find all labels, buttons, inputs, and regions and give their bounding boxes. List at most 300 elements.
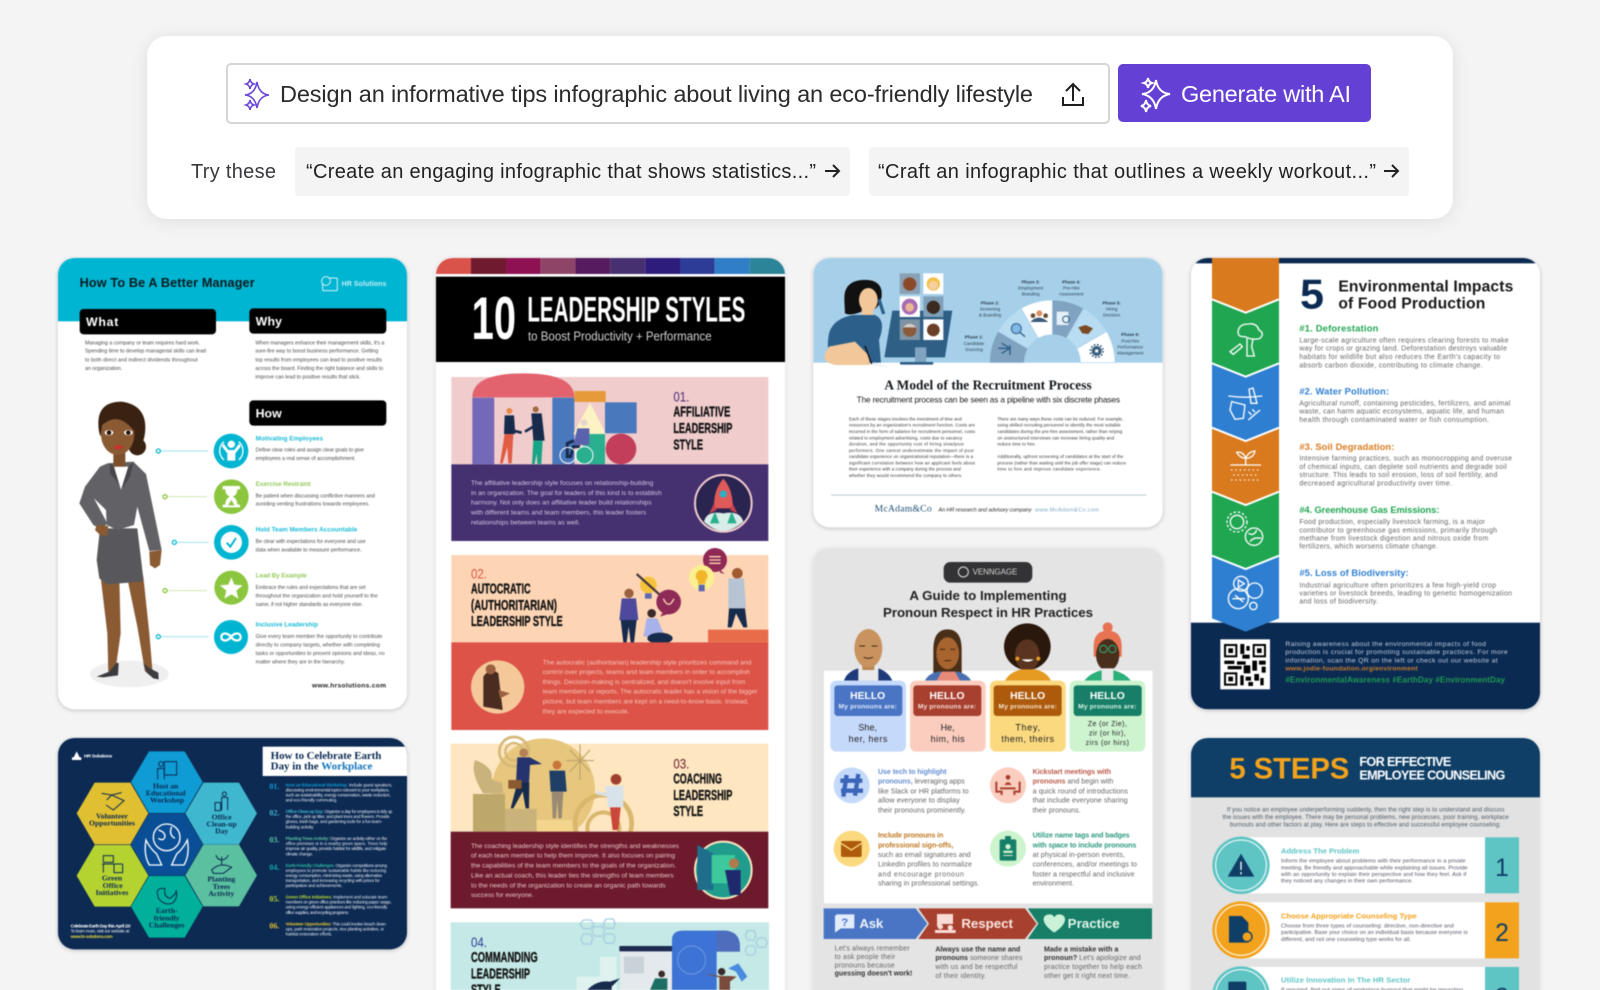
suggestion chip 1 bbox=[295, 147, 850, 196]
left column text: resources by an organization's recruitment function. Costs are bbox=[849, 423, 976, 428]
generate button bbox=[1118, 64, 1371, 122]
name tag: he: He, bbox=[941, 722, 955, 732]
respect text bbox=[934, 946, 1023, 980]
section 02 autocratic bbox=[451, 548, 768, 730]
step 2: participative. Base your choice on an individual basis because everyone is bbox=[1281, 930, 1468, 936]
right column text: using skilled recruiting personnel to identify the most suitable bbox=[997, 423, 1121, 428]
list item 01: such as sustainability, energy conservation, waste reduction, bbox=[286, 792, 391, 797]
body text 02: The autocratic (authoritarian) leadership style prioritizes command and bbox=[543, 659, 752, 666]
practice text: pronoun? Let's apologize and bbox=[1044, 955, 1141, 962]
intro text: burnouts and other factors at play. Here are steps to effective and successful employee counseling: bbox=[1230, 823, 1501, 829]
how item 4 text: throughout the organization and hold yourself to the bbox=[256, 593, 378, 599]
name tag: they: They, bbox=[1015, 722, 1040, 732]
impact 5: #5. Loss of Biodiversity: bbox=[1299, 568, 1409, 578]
why text: across the board. Finding the right balance and skills to bbox=[255, 366, 383, 372]
list item 04 bbox=[269, 863, 388, 888]
section 04 commanding bbox=[451, 919, 769, 990]
impact 4 bbox=[1299, 505, 1497, 550]
tip: kickstart meetings: a quick round of introductions bbox=[1033, 787, 1128, 795]
intro text: If you notice an employee underperforming suddenly, then the right step is to understand and discuss bbox=[1227, 807, 1504, 813]
title: 10: 10 bbox=[472, 284, 516, 352]
illustration: woman on a video call bbox=[824, 273, 952, 368]
list item 05 bbox=[269, 895, 392, 915]
body text 02: they are expected to execute. bbox=[543, 708, 629, 715]
name tag: ze: HELLO bbox=[1090, 691, 1125, 702]
body text 02: team members or reports. The autocratic leader has a vision of the bigger bbox=[543, 689, 758, 696]
step 2: different, and not one counseling type works for all. bbox=[1281, 937, 1411, 943]
hex: office clean-up: Office bbox=[212, 812, 232, 821]
hex: earth-friendly challenges: Earth- bbox=[156, 906, 178, 915]
illustration: businesswoman bbox=[79, 402, 169, 687]
phase labels: Phase 6: bbox=[1121, 332, 1140, 337]
body text 03: to the needs of the organization to create an organic path towards bbox=[471, 882, 666, 889]
illustration: bald person bbox=[844, 629, 892, 681]
Venngage badge bbox=[944, 562, 1032, 583]
heading 02: LEADERSHIP STYLE bbox=[471, 614, 563, 630]
impact 1: #1. Deforestation bbox=[1299, 324, 1379, 334]
title: subtitle bbox=[1359, 755, 1505, 783]
connector lines bbox=[161, 451, 209, 637]
icon: soil plant bbox=[1230, 451, 1261, 480]
right column text: process (rather than waiting until the job offer stage) can reduce bbox=[997, 460, 1127, 465]
title: Environmental Impacts bbox=[1338, 278, 1514, 295]
title: A Model of the Recruitment Process bbox=[884, 377, 1092, 392]
list item 04: Earth-Friendly Challenges: Organize competitions among bbox=[286, 863, 388, 868]
icon: infinity bbox=[214, 620, 248, 654]
label: practice: Practice bbox=[1068, 916, 1120, 931]
icon: purple sparkle bbox=[245, 79, 269, 110]
gallery of infographic cards bbox=[58, 258, 1540, 990]
ask text bbox=[835, 946, 912, 978]
phase labels: Candidate bbox=[964, 341, 985, 346]
ask respect practice banner bbox=[824, 908, 1152, 939]
list item 03 bbox=[269, 836, 388, 856]
name tag: ze: My pronouns are: bbox=[1078, 703, 1136, 710]
tip: name tags: with space to include pronouns bbox=[1032, 841, 1136, 849]
chart: phase wheel bbox=[990, 300, 1115, 363]
tip: sign-offs: professional sign-offs, bbox=[878, 841, 953, 849]
impact 2: #2. Water Pollution: bbox=[1299, 387, 1389, 397]
phase labels: Phase 4: bbox=[1062, 280, 1081, 285]
icon: coach at whiteboard bbox=[695, 842, 752, 898]
right column text: time to hire and improve candidate experience. bbox=[997, 467, 1101, 472]
name tag: she bbox=[830, 681, 906, 752]
tip: sign-offs: sharing in professional settings. bbox=[878, 880, 979, 888]
list item 01 bbox=[269, 782, 392, 803]
footer text: Raising awareness about the environmental impacts of food bbox=[1285, 641, 1486, 648]
how box bbox=[249, 400, 386, 426]
logo: HR Solutions: HR Solutions bbox=[342, 281, 386, 288]
phase labels: Decision bbox=[1103, 312, 1121, 317]
body text 02: control over projects, teams and team members in order to accomplish bbox=[543, 669, 750, 676]
card: Pronoun Respect guide bbox=[812, 548, 1163, 990]
why text: sure-fire way to boost business performance. Getting bbox=[255, 349, 378, 355]
how box: How bbox=[256, 406, 282, 420]
prompt text: Design an informative tips infographic about living an eco-friendly lifestyle bbox=[280, 81, 1033, 107]
title: 5 steps: 5 STEPS bbox=[1229, 753, 1349, 786]
heading 03: STYLE bbox=[673, 804, 703, 820]
tip: sign-offs: such as email signatures and bbox=[878, 851, 971, 859]
icon: leader portrait bbox=[471, 660, 524, 714]
right column text bbox=[997, 416, 1127, 472]
body text 01: relationships between teams as well. bbox=[471, 519, 580, 526]
impact 3 bbox=[1299, 442, 1512, 487]
how item 4 text: Embrace the rules and expectations that are set bbox=[256, 585, 366, 591]
illustration: hexagon pattern and blueprint bbox=[577, 919, 767, 990]
phase labels bbox=[964, 280, 1144, 355]
tip: name tags: environment. bbox=[1033, 880, 1074, 888]
how item 2 text: avoiding venting frustrations towards employees. bbox=[256, 502, 370, 508]
name tag: he: him, his bbox=[931, 734, 965, 744]
how item 5 text: directly to company targets, whether with completing bbox=[256, 643, 380, 649]
list item 05: members on green office practices like reducing paper usage, bbox=[286, 900, 392, 905]
illustration: long-haired person bbox=[925, 629, 971, 681]
tip: sign-offs: Include pronouns in bbox=[878, 832, 943, 840]
impact 2: waste, can harm aquatic ecosystems, aquatic life, and human bbox=[1298, 409, 1504, 416]
celebrate note: Celebrate Earth Day this April 22! bbox=[71, 923, 131, 928]
name tag: ze: zirs (or hirs) bbox=[1086, 740, 1129, 747]
list item 04: 04. bbox=[269, 863, 279, 872]
impact 1 bbox=[1298, 324, 1509, 369]
subtitle: to Boost Productivity + Performance bbox=[528, 330, 712, 344]
list item 02: gloves, trash bags, and gardening tools for a fun team- bbox=[286, 819, 383, 824]
tip: sign-offs bbox=[834, 831, 979, 888]
list item 05: Green Office Initiatives: Implement and educate team bbox=[286, 895, 388, 900]
what text bbox=[85, 340, 206, 372]
right column text: There are many ways these costs can be reduced. For example, bbox=[997, 416, 1123, 421]
step 3: Utilize Innovation In The HR Sector bbox=[1281, 976, 1410, 985]
title box: How to Celebrate Earth bbox=[271, 750, 381, 762]
left column text: significant correlation between how an applicant feels about bbox=[849, 460, 976, 465]
tip: name tags: Utilize name tags and badges bbox=[1033, 832, 1130, 840]
left column text: duration, and the opportunity cost of hiring slow/poor bbox=[849, 442, 965, 447]
list item 02 bbox=[269, 809, 393, 829]
respect text: with us and be respectful bbox=[934, 964, 1018, 971]
tip: use tech: allow everyone to display bbox=[878, 797, 960, 805]
phase labels: Performance bbox=[1117, 344, 1144, 349]
how item 2 text bbox=[256, 481, 375, 508]
phase labels: Phase 5: bbox=[1102, 300, 1121, 305]
suggestion chip 2 bbox=[869, 147, 1409, 196]
illustration: team with lightbulbs bbox=[619, 548, 768, 644]
left column text: related to employment advertising, costs due to vacancy bbox=[849, 435, 963, 440]
ribbon of colored chevrons bbox=[1212, 258, 1279, 632]
step 1: with an opportunity to explain their perspective and how they feel. Ask if bbox=[1280, 872, 1467, 878]
illustration: person with head wrap bbox=[1084, 622, 1131, 681]
title: How To Be A Better Manager bbox=[80, 276, 255, 290]
heading 04 bbox=[471, 934, 538, 990]
phase labels: Assessment bbox=[1059, 292, 1084, 297]
why text: top results from employees can lead to positive results bbox=[255, 357, 382, 363]
impact 1: habitats for wildlife but also reduces the Earth's capacity to bbox=[1299, 354, 1500, 361]
list item 05: using energy-efficient appliances and lighting, eco-friendly bbox=[286, 905, 388, 910]
tip: kickstart meetings: their pronouns. bbox=[1033, 807, 1081, 815]
right column text: Additionally, upfront screening of candidates at the start of the bbox=[997, 454, 1124, 459]
card: A Model of the Recruitment Process bbox=[813, 258, 1163, 527]
icon: question bubble: ? bbox=[841, 917, 848, 929]
phase labels: & Boarding bbox=[979, 312, 1002, 317]
tip: use tech: like Slack or HR platforms to bbox=[878, 787, 969, 795]
phase labels: Hiring bbox=[1106, 306, 1118, 311]
list item 06: ups, park restoration projects, tree planting activities, or bbox=[286, 927, 385, 932]
tip: kickstart meetings bbox=[990, 767, 1128, 815]
how item 5 text: matter where they are in the hierarchy. bbox=[256, 660, 345, 666]
impact 3: of chemical inputs, can deplete soil nutrients and degrade soil bbox=[1299, 464, 1507, 471]
list item 02: the office, pick up litter, and plant trees and flowers. Provide bbox=[286, 814, 390, 819]
celebrate note bbox=[70, 923, 131, 939]
phase labels: Phase 1: bbox=[965, 334, 984, 339]
list item 01: and eco-friendly commuting. bbox=[286, 798, 337, 803]
how item 5 text: Give every team member the opportunity to contribute bbox=[256, 634, 382, 640]
name tag: ze: zir (or hir), bbox=[1089, 730, 1126, 737]
hex: host workshop bbox=[131, 751, 203, 813]
wheel icons bbox=[998, 310, 1103, 357]
title: A Guide to Implementing bbox=[909, 588, 1067, 603]
footer text: production is crucial for promoting sustainable practices. For more bbox=[1285, 649, 1508, 656]
what box: What bbox=[86, 315, 118, 329]
body text 03: The coaching leadership style identifies the strengths and weaknesses bbox=[471, 843, 680, 850]
icon: people with speech bubble bbox=[935, 914, 956, 933]
heading 01: LEADERSHIP bbox=[673, 421, 732, 437]
logo: HR Solutions bbox=[322, 277, 386, 291]
icon: warning triangle bbox=[1228, 854, 1254, 877]
step 2: Choose from three types of counseling: directive, non-directive and bbox=[1281, 923, 1454, 929]
logo: HR Solutions: HR Solutions bbox=[84, 753, 113, 759]
impact 2: health through contaminated water or fish consumption. bbox=[1299, 417, 1489, 424]
list item 01: Host an Educational Workshop: Include guest speakers, bbox=[286, 782, 392, 787]
illustration: curly-haired person bbox=[1004, 623, 1051, 681]
name tag: they: them, theirs bbox=[1001, 734, 1054, 744]
hex: volunteer opportunities bbox=[77, 783, 148, 844]
respect text: Always use the name and bbox=[935, 946, 1020, 953]
impact 1: Large-scale agriculture often requires clearing forests to make bbox=[1299, 337, 1509, 344]
why text bbox=[255, 340, 384, 380]
ask text: pronouns because bbox=[835, 962, 895, 969]
phase labels: Branding bbox=[1022, 292, 1040, 297]
hex: office clean-up: Day bbox=[215, 827, 228, 836]
what box bbox=[80, 309, 216, 334]
card: How to Celebrate Earth Day bbox=[58, 738, 407, 949]
list item 05: office supplies, and recycling programs. bbox=[286, 910, 349, 915]
left column text: performers. One cannot underestimate the impact of poor bbox=[849, 448, 975, 453]
phase labels: Phase 3: bbox=[1021, 280, 1040, 285]
impact 4: #4. Greenhouse Gas Emissions: bbox=[1299, 505, 1439, 515]
card: 5 Environmental Impacts bbox=[1191, 258, 1540, 709]
impact 2: Agricultural runoff, containing pesticides, fertilizers, and animal bbox=[1299, 401, 1511, 408]
footer logo and tagline: An HR research and advisory company bbox=[937, 507, 1033, 513]
how item 2 text: Be patient when discussing conflictive manners and bbox=[256, 493, 375, 499]
left column text bbox=[849, 416, 976, 478]
impact 3: #3. Soil Degradation: bbox=[1299, 442, 1394, 452]
impact 1: way for crops or grazing land. Deforestation destroys valuable bbox=[1298, 346, 1507, 353]
ask text: Let's always remember bbox=[835, 946, 910, 953]
icon: question bubble bbox=[835, 914, 854, 933]
hex: host workshop: Workshop bbox=[150, 796, 184, 805]
tip: sign-offs: LinkedIn profiles to normalize bbox=[878, 860, 972, 868]
name tag: she: My pronouns are: bbox=[838, 703, 897, 710]
impact 4: Food production, especially livestock farming, is a major bbox=[1299, 519, 1486, 526]
phase labels: Screening bbox=[980, 306, 1001, 311]
phase labels: Management bbox=[1117, 350, 1144, 355]
left column text: their experience with a company during the process and bbox=[849, 467, 961, 472]
how item 1 text: Motivating Employees bbox=[256, 435, 323, 442]
body text 01 bbox=[470, 480, 662, 526]
hex: green office: Green bbox=[102, 874, 123, 883]
hex: planting trees: Planting bbox=[208, 875, 235, 884]
impact 5: Industrial agriculture often prioritizes a few high-yield crop bbox=[1299, 582, 1496, 589]
ask text: to ask people their bbox=[835, 954, 896, 961]
step 1: they noticed any changes in their own performance. bbox=[1281, 879, 1413, 885]
section 03 coaching bbox=[451, 737, 768, 908]
list item 04: energy consumption, minimizing waste, using alternative bbox=[286, 873, 383, 878]
how item 5 text bbox=[256, 622, 385, 666]
QR code bbox=[1220, 639, 1270, 689]
body text 03: Like an actual coach, this leader ties the strengths of team members bbox=[471, 872, 674, 879]
icon: exercise restraint bbox=[214, 479, 249, 514]
phase labels: Phase 2: bbox=[981, 300, 1000, 305]
how item 1 text: employees a real sense of accomplishment. bbox=[256, 456, 356, 462]
hex: planting trees: Trees bbox=[213, 882, 230, 891]
step 3 bbox=[1212, 966, 1519, 990]
illustration: building blocks and people bbox=[472, 373, 637, 464]
list item 04: participation and achievements. bbox=[286, 883, 342, 888]
icon: star bbox=[214, 571, 248, 605]
left column text: candidate experience on organizational reputation—there is a bbox=[849, 454, 974, 459]
heading 04: 04. bbox=[471, 934, 487, 950]
list item 05: 05. bbox=[269, 895, 279, 904]
list item 04: employees to promote sustainable habits like reducing bbox=[286, 868, 387, 873]
tip: name tags: at physical in-person events, bbox=[1033, 851, 1125, 859]
phase labels: Employment bbox=[1018, 286, 1044, 291]
celebrate note: To learn more, visit our website at: bbox=[71, 929, 130, 934]
what text: an organization. bbox=[85, 366, 122, 372]
practice text bbox=[1044, 946, 1142, 980]
how item 5 text: tasks or opportunities to present opinions and ideas, no bbox=[256, 651, 385, 657]
what text: Spending time to develop managerial skills can lead bbox=[85, 349, 206, 355]
icon: white sparkle bbox=[1141, 78, 1170, 112]
impact 4: fertilizers, which worsens climate change. bbox=[1299, 543, 1438, 550]
list item 06: habitat restoration efforts. bbox=[286, 932, 332, 937]
impact 4: methane from livestock digestion and nitrous oxide from bbox=[1299, 535, 1489, 542]
list item 03: climate change. bbox=[286, 851, 313, 856]
how item 3 text bbox=[256, 527, 366, 554]
tip: sign-offs: and encourage pronoun bbox=[878, 870, 964, 878]
hex: earth-friendly challenges: friendly bbox=[154, 913, 180, 922]
what text: to both direct and indirect dividends throughout bbox=[85, 357, 198, 363]
footer text: #EnvironmentalAwareness #EarthDay #EnvironmentDay bbox=[1285, 676, 1506, 685]
how item 3 text: Hold Team Members Accountable bbox=[256, 527, 358, 534]
heading 01 bbox=[673, 389, 732, 453]
list item 03: 03. bbox=[269, 836, 279, 845]
step 1: 1 bbox=[1495, 855, 1509, 882]
subtitle: The recruitment process can be seen as a pipeline with six discrete phases bbox=[857, 394, 1120, 404]
panel: prompt search box bbox=[147, 36, 1453, 219]
why box: Why bbox=[256, 314, 282, 328]
tip: kickstart meetings: Kickstart meetings with bbox=[1033, 768, 1111, 776]
respect text: of their identity. bbox=[935, 973, 986, 980]
hex: earth-friendly challenges bbox=[131, 876, 203, 938]
icon: rocket bbox=[695, 475, 752, 532]
how item 3 text: data when available to measure performance. bbox=[256, 548, 362, 554]
title: subtitle: EMPLOYEE COUNSELING bbox=[1359, 769, 1505, 783]
footer text bbox=[1284, 641, 1508, 685]
hex: volunteer opportunities: Volunteer bbox=[96, 811, 129, 820]
step 1: Address The Problem bbox=[1281, 846, 1360, 855]
practice text: practice together to help each bbox=[1044, 964, 1142, 971]
icon: deforestation bbox=[1230, 324, 1262, 356]
impact 4: contributor to greenhouse gas emissions, primarily through bbox=[1299, 527, 1497, 534]
tip: name tags: foster a respectful and inclusive bbox=[1033, 870, 1135, 878]
tip: use tech: Use tech to highlight bbox=[878, 768, 947, 776]
phase labels: Pre-Hire bbox=[1063, 286, 1080, 291]
heading 03 bbox=[673, 756, 732, 820]
impact 5: varieties or livestock breeds, leading to genetic homogenization bbox=[1299, 591, 1512, 598]
step 2: Choose Appropriate Counseling Type bbox=[1281, 911, 1417, 920]
how item 4 text: same, if not higher standards as everyone else. bbox=[256, 602, 363, 608]
title bbox=[883, 588, 1093, 620]
footer text: information, scan the QR on the left or check out our website at bbox=[1285, 657, 1498, 664]
tip: use tech bbox=[834, 767, 969, 815]
impact 5: and loss of biodiversity. bbox=[1299, 599, 1378, 606]
title: leadership styles: LEADERSHIP STYLES bbox=[527, 290, 745, 329]
body text 02: picture, but team members are kept on a need-to-know basis. Instead, bbox=[543, 699, 749, 706]
title box bbox=[263, 747, 407, 776]
title: of Food Production bbox=[1338, 296, 1485, 313]
impact 1: absorb carbon dioxide, contributing to climate change. bbox=[1299, 362, 1483, 369]
name tag: she: her, hers bbox=[849, 734, 888, 744]
logo: HR Solutions bbox=[72, 751, 113, 760]
icon: document search bbox=[1229, 916, 1248, 943]
heading 03: COACHING bbox=[673, 772, 722, 788]
name tag: he: My pronouns are: bbox=[918, 703, 976, 710]
hex: earth-friendly challenges: Challenges bbox=[149, 920, 185, 929]
footer logo and tagline: www.McAdam&Co.com bbox=[1034, 507, 1099, 513]
how item 4 text bbox=[256, 573, 378, 608]
icon: upload bbox=[1063, 84, 1083, 105]
list item 06: 06. bbox=[269, 922, 279, 931]
icon: water pollution bbox=[1228, 388, 1262, 420]
card: How To Be A Better Manager bbox=[58, 258, 407, 709]
prompt input field bbox=[227, 64, 1109, 123]
step 2: 2 bbox=[1495, 920, 1509, 947]
how item 2 text: Exercise Restraint bbox=[256, 481, 312, 488]
right column text: on unstructured interviews can increase hiring quality and bbox=[997, 435, 1115, 440]
hex: planting trees bbox=[185, 845, 257, 906]
phase labels: Post-hire bbox=[1121, 338, 1140, 343]
step 1: meeting. Be friendly and approachable while explaining all issues. Provide bbox=[1281, 865, 1468, 871]
heading 03: LEADERSHIP bbox=[673, 788, 732, 804]
heading 03: 03. bbox=[673, 756, 689, 772]
heading 01: AFFILIATIVE bbox=[673, 405, 730, 421]
list item 01: discussing environmental topics relevant to your workplace, bbox=[286, 787, 390, 792]
title bbox=[1338, 278, 1514, 313]
hex: center globe in hands bbox=[131, 814, 203, 875]
hex: host workshop: Educational bbox=[146, 789, 185, 798]
name tag: he: HELLO bbox=[929, 691, 964, 702]
practice text: Made a mistake with a bbox=[1044, 946, 1118, 953]
list item 03: office premises or in a nearby green space. Trees help bbox=[286, 841, 388, 846]
right column text: reduce time to hire. bbox=[997, 442, 1036, 447]
hex: green office bbox=[77, 845, 148, 907]
tip: kickstart meetings: that include everyone sharing bbox=[1033, 797, 1128, 805]
list item 02: 02. bbox=[269, 809, 279, 818]
body text 03: the capabilities of the team members to the goals of the organization. bbox=[471, 863, 676, 870]
tip: use tech: pronouns, leveraging apps bbox=[878, 778, 965, 786]
celebrate note: www.hr-solutions.com bbox=[70, 934, 113, 939]
heading 02: (AUTHORITARIAN) bbox=[471, 598, 557, 614]
icon: motivating employees bbox=[214, 434, 248, 468]
body text 02 bbox=[543, 659, 758, 715]
